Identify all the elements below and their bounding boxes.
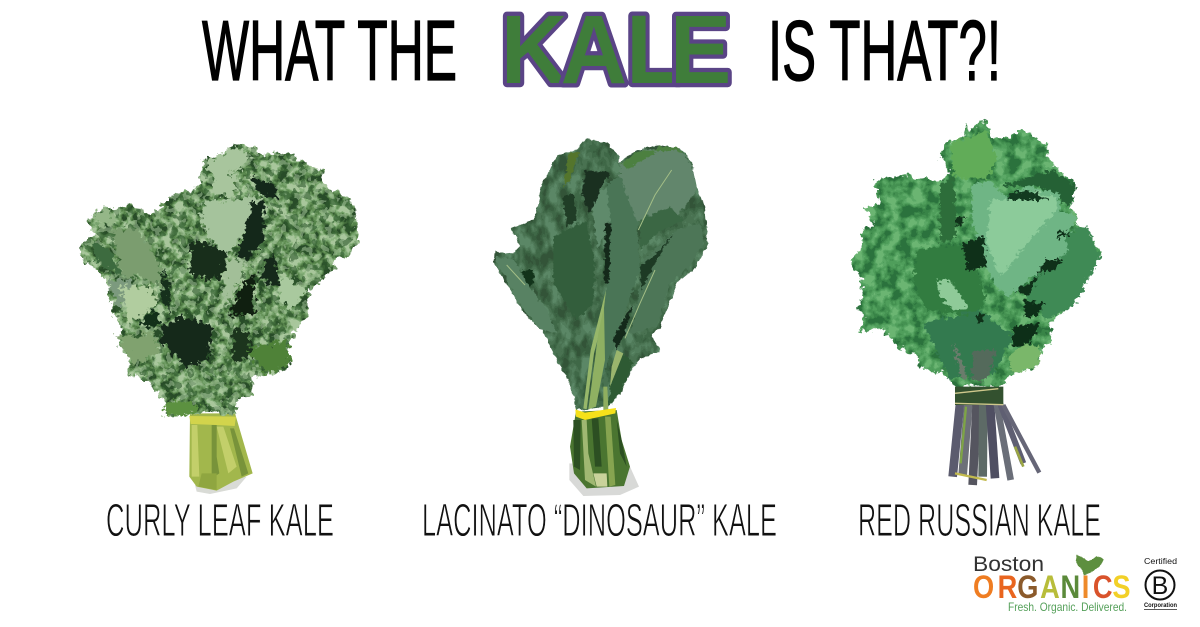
title: what the: WHAT THE: [202, 4, 457, 99]
b corp: letter b: B: [1152, 572, 1168, 600]
logo: tagline: Fresh. Organic. Delivered.: [1008, 600, 1127, 614]
b corp: circle: [1146, 570, 1174, 600]
stems: [570, 410, 630, 488]
label: lacinato dinosaur kale: LACINATO “DINOSAUR” KALE: [422, 494, 777, 546]
twine band: [955, 387, 1003, 405]
foliage: [493, 138, 707, 410]
b corp: corporation: Corporation: [1144, 603, 1177, 609]
stem shadow: [195, 477, 247, 494]
foliage: [80, 143, 358, 417]
b corp: certified: Certified: [1144, 556, 1177, 566]
illustration: red russian kale: [850, 120, 1102, 485]
title: is that: IS THAT?!: [768, 4, 1001, 99]
logo: organics wordmark: ORGANICS: [973, 570, 1131, 606]
logo: certified b corporation: [1144, 556, 1177, 610]
logo: boston wordmark: Boston: [973, 552, 1044, 576]
yellow band: [575, 408, 616, 420]
illustration: curly leaf kale: [80, 143, 358, 494]
stem shadow: [569, 463, 639, 496]
logo: carrot top: [1074, 553, 1104, 576]
illustration: lacinato dinosaur kale: [493, 138, 707, 496]
stems: [953, 403, 1039, 485]
center rib: [583, 290, 606, 409]
label: curly leaf kale: CURLY LEAF KALE: [106, 494, 334, 546]
stems: [189, 413, 253, 491]
leaf veins: [507, 170, 672, 338]
foliage: [850, 120, 1102, 387]
title: [202, 0, 1001, 105]
twine band: [189, 416, 236, 426]
logo: boston organics: [973, 552, 1131, 614]
